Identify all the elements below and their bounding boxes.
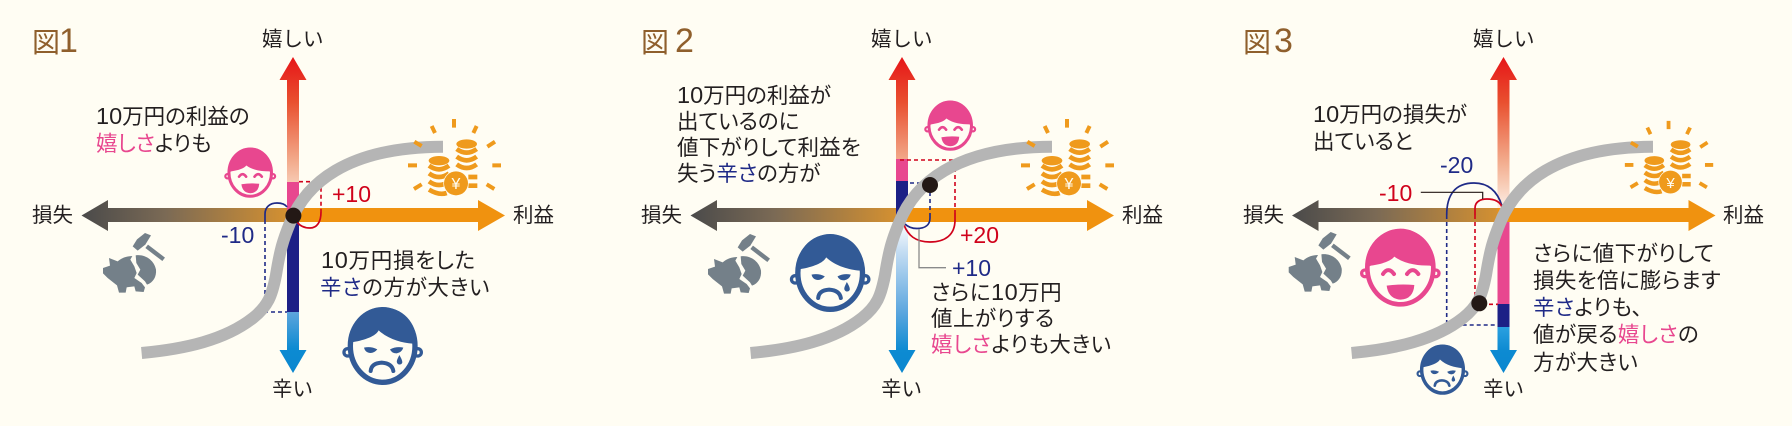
icon: happy face [925,101,975,149]
text block: lower right: 値が戻る嬉しさの [1533,323,1699,347]
text block: lower right: 嬉しさよりも大きい [931,333,1111,357]
heading: 図1: 図1 [32,22,78,60]
text block: upper left: 嬉しさよりも [96,132,211,156]
text block: lower right: さらに値下がりして [1533,242,1714,266]
text block: upper left [96,103,250,156]
text block: lower right: 損失を倍に膨らます [1533,269,1721,293]
red guide: -10 [1475,215,1498,304]
text block: upper left: 10万円の利益が [677,82,831,108]
point on curve [922,177,938,193]
text block: upper left: 10万円の損失が [1313,101,1467,127]
text block: lower right: 辛さの方が大きい [320,276,490,300]
text block: lower right: 値上がりする [931,307,1055,331]
icon: broken piggy bank [103,233,164,293]
s-curve [142,147,443,353]
s-curve [751,147,1052,353]
leader line [919,229,946,268]
axis label left: 損失 [32,204,73,227]
icon: crying face [792,234,869,309]
axis label top: 嬉しい [871,28,932,51]
icon: happy face [1362,229,1439,304]
panel: figure 3 [1243,22,1764,401]
axis label top: 嬉しい [1473,28,1534,51]
icon: coins [1021,119,1114,196]
axis label top: 嬉しい [262,28,324,51]
axis label left: 損失 [641,204,682,227]
value -20: -20 [1440,152,1473,178]
icon: coins [1625,121,1713,194]
red guide: +10 [299,182,321,212]
icon: broken piggy bank [708,234,769,294]
value -10: -10 [221,222,254,248]
panel: figure 2 [641,22,1163,401]
text block: lower right: 方が大きい [1533,351,1638,375]
axis label right: 利益 [1723,204,1764,227]
text block: upper left: 失う辛さの方が [677,162,820,186]
icon: yen mark: ¥ [1665,175,1675,192]
point on curve [1471,295,1487,311]
axis arrows [690,57,1114,373]
axis label bottom: 辛い [1483,378,1524,401]
text block: lower right: さらに10万円 [931,279,1062,305]
text block: upper left: 値下がりして利益を [677,136,861,160]
text block: lower right [931,279,1111,357]
point on curve [285,208,301,224]
icon: crying face [1418,345,1467,393]
text block: upper left [1313,101,1467,154]
navy guide: -10 [265,220,287,312]
text block: lower right [320,247,490,300]
icon: yen mark: ¥ [451,176,461,193]
axis label right: 利益 [513,204,554,227]
icon: broken piggy bank [1289,232,1349,292]
heading: 図2: 図2 [641,22,694,60]
text block: lower right [1533,242,1721,375]
axis label right: 利益 [1122,204,1163,227]
icon: crying face [344,307,421,382]
text block: lower right: 10万円損をした [321,247,476,273]
heading: 図3: 図3 [1243,22,1293,60]
text block: upper left [677,82,861,186]
axis arrows [1292,57,1716,373]
axis label bottom: 辛い [272,378,313,401]
s-curve [1352,147,1653,353]
text block: upper left: 10万円の利益の [96,103,250,129]
value -10: -10 [1379,180,1412,206]
icon: coins [408,119,501,196]
navy guide: -20 [1447,215,1498,325]
panel: figure 1 [32,22,554,401]
axis label bottom: 辛い [881,378,922,401]
icon: yen mark: ¥ [1064,176,1074,193]
text block: upper left: 出ているのに [677,110,799,134]
value +10: +10 [332,181,371,207]
text block: lower right: 辛さよりも、 [1533,296,1643,320]
value +10: +10 [952,255,991,281]
red guide: +20 [900,160,955,213]
icon: happy face [225,148,275,196]
text block: upper left: 出ていると [1313,130,1413,154]
value +20: +20 [960,222,999,248]
axis arrows [82,57,505,373]
axis label left: 損失 [1243,204,1284,227]
leader line [1421,192,1483,199]
navy guide: +10 [910,183,930,213]
